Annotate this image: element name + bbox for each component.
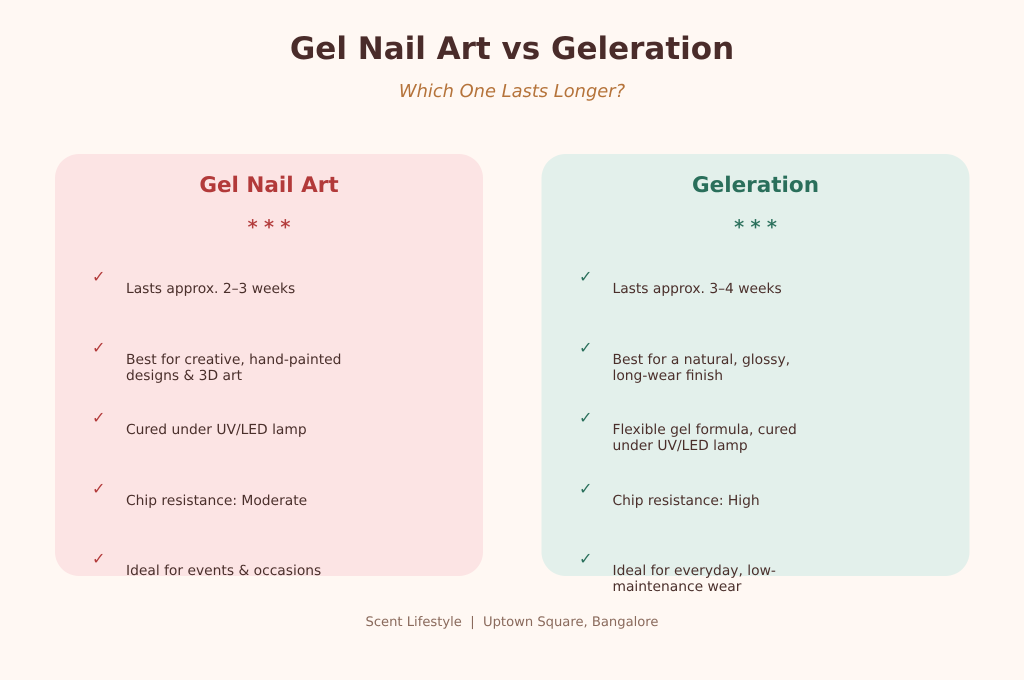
item: chip resistance <box>92 479 307 509</box>
panel background <box>542 154 970 576</box>
panel heading: Gel Nail Art <box>199 173 339 198</box>
panel: gel nail art <box>55 154 483 579</box>
item: best for <box>92 338 341 384</box>
item: curing: Cured under UV/LED lamp <box>126 422 307 438</box>
item: best for: designs & 3D art <box>126 368 243 384</box>
item: ideal for <box>579 549 776 595</box>
decorative stars: * * * <box>248 215 290 239</box>
item: chip resistance: Chip resistance: Moderate <box>126 493 307 509</box>
item: best for: Best for a natural, glossy, <box>612 352 790 368</box>
item: duration: Lasts approx. 3–4 weeks <box>612 281 782 297</box>
item: best for <box>579 338 790 384</box>
item: duration: Lasts approx. 2–3 weeks <box>126 281 295 297</box>
item: duration <box>92 267 295 297</box>
item: formula <box>579 408 797 454</box>
item: ideal for: maintenance wear <box>612 579 742 595</box>
panel heading: Geleration <box>692 173 819 198</box>
title: Gel Nail Art vs Geleration <box>290 31 734 67</box>
item: best for: Best for creative, hand-painted <box>126 352 341 368</box>
item: ideal for: ✓ <box>92 549 105 568</box>
item: ideal for <box>92 549 321 579</box>
item: formula: under UV/LED lamp <box>612 438 748 454</box>
footer: Scent Lifestyle | Uptown Square, Bangalore <box>365 615 658 630</box>
item: curing <box>92 408 307 438</box>
item: ideal for: Ideal for events & occasions <box>126 563 321 579</box>
item: ideal for: ✓ <box>579 549 592 568</box>
item: duration: ✓ <box>579 267 592 286</box>
subtitle: Which One Lasts Longer? <box>399 81 626 102</box>
item: best for: ✓ <box>92 338 105 357</box>
item: formula: Flexible gel formula, cured <box>612 422 797 438</box>
item: best for: long-wear finish <box>612 368 723 384</box>
item: chip resistance <box>579 479 760 509</box>
item: curing: ✓ <box>92 408 105 427</box>
item: chip resistance: Chip resistance: High <box>612 493 760 509</box>
item: ideal for: Ideal for everyday, low- <box>612 563 776 579</box>
panel: geleration <box>542 154 970 595</box>
item: best for: ✓ <box>579 338 592 357</box>
item: formula: ✓ <box>579 408 592 427</box>
decorative stars: * * * <box>734 215 777 239</box>
item: chip resistance: ✓ <box>579 479 592 498</box>
item: chip resistance: ✓ <box>92 479 105 498</box>
item: duration <box>579 267 782 297</box>
item: duration: ✓ <box>92 267 105 286</box>
panel background <box>55 154 483 576</box>
